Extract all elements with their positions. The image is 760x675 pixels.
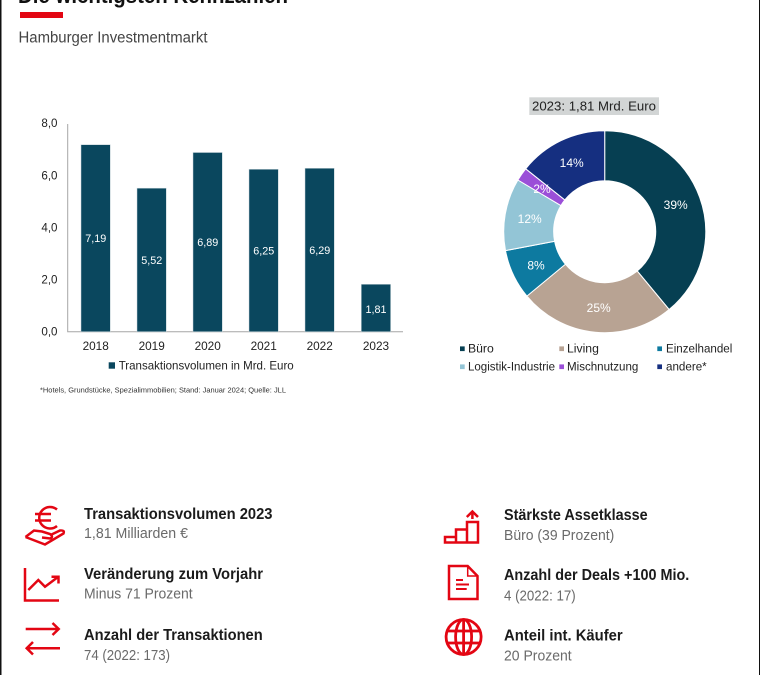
bars: [81, 145, 391, 332]
KPI: Anzahl Transaktionen: 74 (2022: 173): [84, 647, 170, 664]
panel: bar chart: [40, 117, 403, 395]
bar value labels: 5,52: [141, 255, 162, 267]
KPI: Anzahl Transaktionen: [26, 623, 263, 664]
y axis labels: 2,0: [41, 273, 58, 286]
donut legend: [460, 342, 732, 374]
KPI: Anteil int. Käufer: 20 Prozent: [504, 648, 572, 664]
icon: exchange arrows: [26, 623, 60, 654]
bar value labels: 7,19: [85, 233, 106, 245]
bar value labels: 6,29: [309, 245, 330, 257]
KPI: Veränderung: [25, 566, 263, 602]
KPI: Stärkste Assetklasse: [445, 507, 648, 544]
icon: rising steps: [445, 512, 478, 542]
donut title: 2023: 1,81 Mrd. Euro: [532, 99, 656, 114]
donut slices: [504, 131, 706, 333]
title accent bar: [20, 12, 63, 18]
chart legend: Transaktionsvolumen in Mrd. Euro: [119, 358, 294, 372]
icon: document: [449, 566, 478, 599]
KPI: Veränderung: Minus 71 Prozent: [84, 586, 193, 602]
KPI: Deals: [449, 566, 689, 604]
donut percentage labels: [518, 156, 688, 315]
chart axes: [68, 124, 403, 332]
donut legend: Büro: [468, 342, 494, 356]
x axis labels: 2021: [251, 339, 277, 353]
donut percentage labels: 12%: [518, 212, 542, 226]
KPI: Stärkste Assetklasse: Stärkste Assetklasse: [504, 507, 648, 524]
y axis labels: 8,0: [41, 117, 58, 130]
donut percentage labels: 39%: [664, 198, 688, 212]
donut percentage labels: 14%: [560, 156, 584, 170]
y axis labels: 0,0: [41, 326, 58, 339]
x axis labels: 2022: [307, 339, 333, 353]
KPI: Anteil int. Käufer: [446, 620, 623, 664]
x axis labels: [83, 339, 390, 353]
x axis labels: 2019: [139, 339, 165, 353]
donut legend: Logistik-Industrie: [468, 360, 555, 374]
y axis labels: 6,0: [41, 169, 58, 182]
donut legend: Mischnutzung: [567, 360, 638, 374]
KPI: Stärkste Assetklasse: Büro (39 Prozent): [504, 527, 614, 544]
bar value labels: [85, 233, 387, 316]
KPI: Anteil int. Käufer: Anteil int. Käufer: [504, 628, 623, 644]
KPI: Veränderung: Veränderung zum Vorjahr: [84, 566, 263, 583]
panel: donut chart: [460, 97, 732, 374]
x axis labels: 2020: [195, 339, 221, 353]
subtitle: Hamburger Investmentmarkt: [18, 30, 208, 46]
icon: euro in hand: [26, 507, 64, 544]
KPI: Transaktionsvolumen: Transaktionsvolumen 2023: [84, 506, 273, 523]
x axis labels: 2023: [363, 339, 390, 353]
bar value labels: 6,25: [253, 246, 274, 258]
icon: line chart: [25, 568, 59, 600]
bar value labels: 6,89: [197, 237, 218, 249]
KPI: Anzahl Transaktionen: Anzahl der Transaktionen: [84, 627, 263, 644]
KPI: Transaktionsvolumen: [26, 506, 273, 544]
footnote: *Hotels, Grundstücke, Spezialimmobilien; Stand: Januar 2024; Quelle: JLL: [40, 386, 286, 395]
y axis labels: 4,0: [41, 221, 58, 234]
donut legend: andere*: [666, 360, 707, 374]
donut percentage labels: 2%: [533, 182, 551, 196]
bar value labels: 1,81: [365, 304, 387, 316]
KPI: Deals: 4 (2022: 17): [504, 588, 576, 604]
icon: globe: [446, 620, 481, 654]
donut legend: Living: [567, 342, 599, 356]
KPI: Transaktionsvolumen: 1,81 Milliarden €: [84, 525, 189, 542]
donut percentage labels: 8%: [527, 258, 545, 272]
donut percentage labels: 25%: [587, 301, 611, 315]
y axis labels: [41, 117, 58, 339]
KPI: Deals: Anzahl der Deals +100 Mio.: [504, 567, 689, 584]
x axis labels: 2018: [83, 339, 109, 353]
donut legend: Einzelhandel: [666, 342, 732, 356]
